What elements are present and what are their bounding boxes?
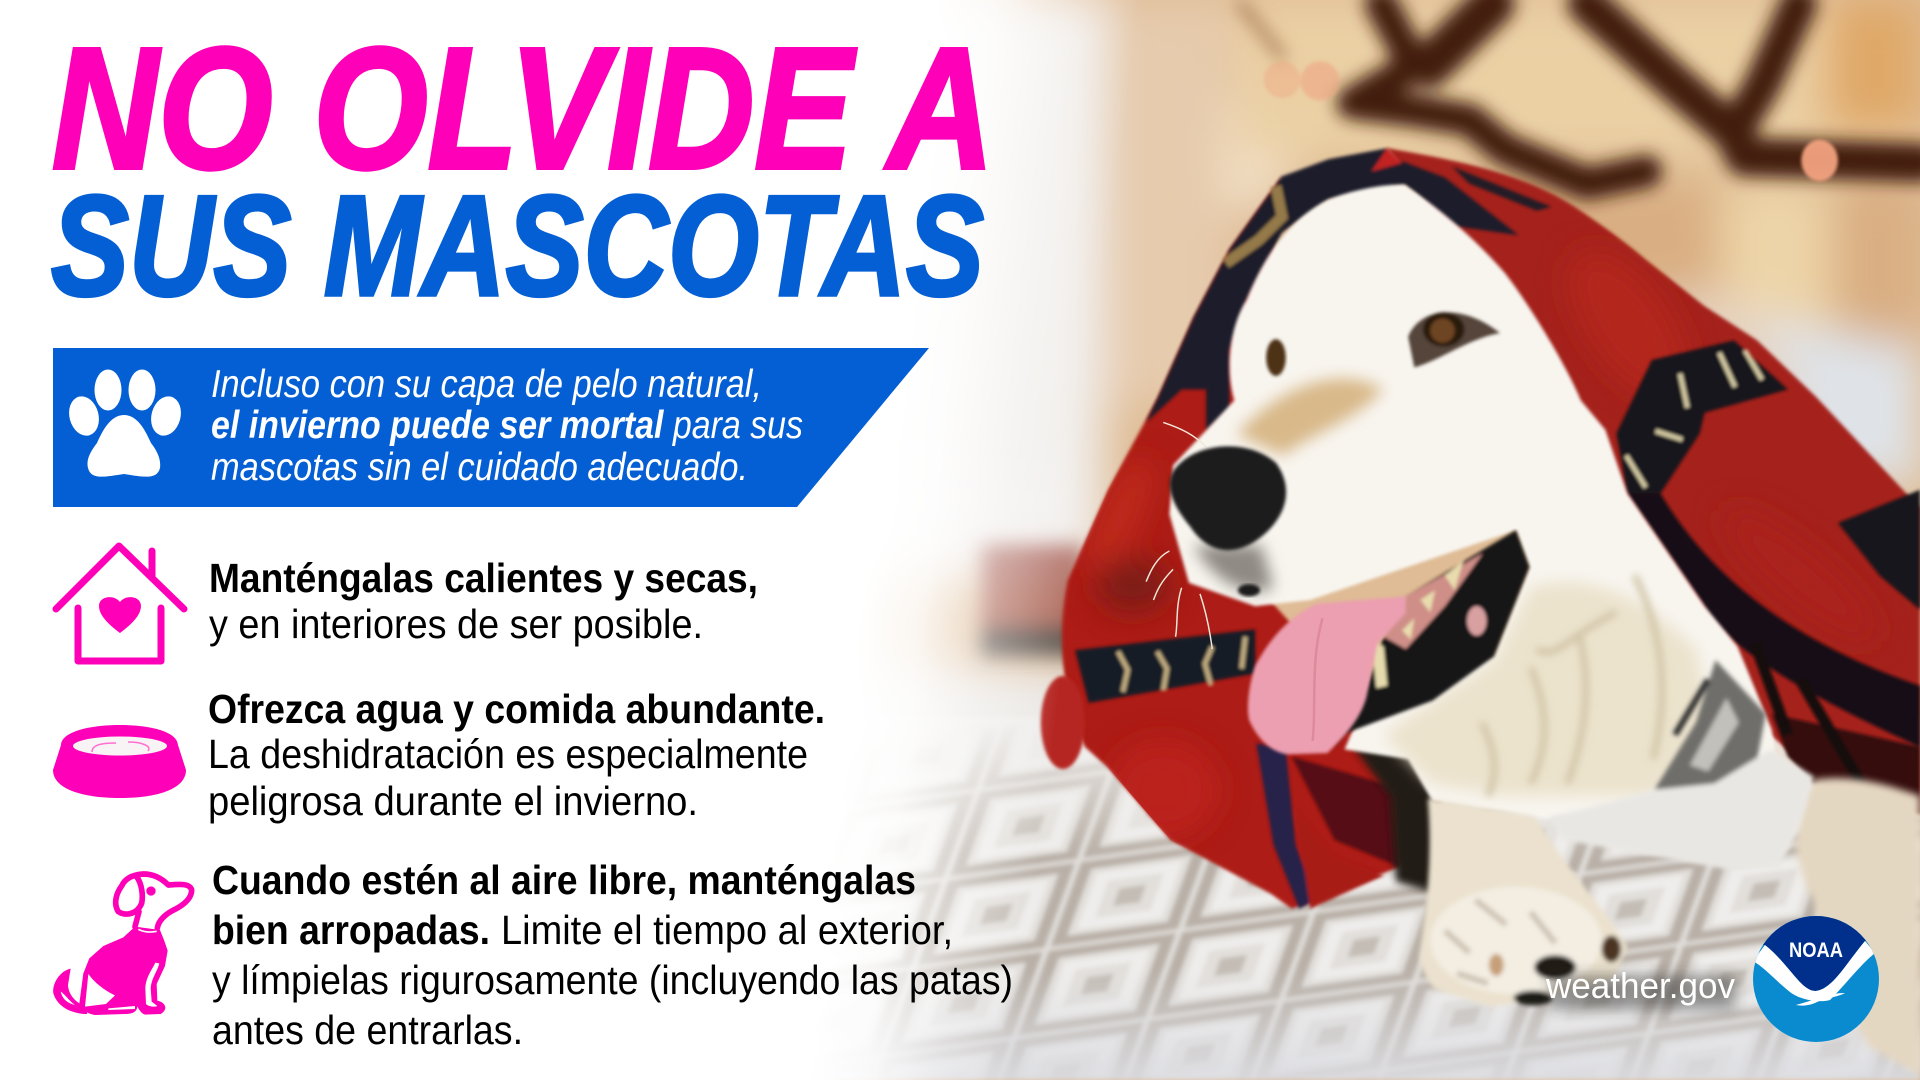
eye: right <box>1408 312 1500 367</box>
text: water and food: La deshidratación es especialmente <box>208 731 808 777</box>
website label: weather.gov <box>1545 965 1735 1006</box>
grey striped sweater <box>1549 660 1813 869</box>
text: keep warm and dry <box>209 555 758 647</box>
gold stripe on hood <box>1226 186 1282 263</box>
banner text: Incluso con su capa de pelo natural, <box>211 363 762 406</box>
blurred room background <box>784 0 1920 753</box>
banner text: mascotas sin el cuidado adecuado. <box>211 446 748 489</box>
dark lattice behind the dog <box>1240 4 1920 184</box>
black band with cream marks <box>1616 340 1788 493</box>
tan muzzle <box>1237 379 1384 456</box>
bokeh lights <box>1264 61 1838 181</box>
icon: paw <box>65 370 185 477</box>
shadow under the chin <box>1353 722 1439 894</box>
lower left blanket stripe <box>1075 629 1255 703</box>
patterned bedspread <box>784 716 1920 1080</box>
mouth corner dark spot <box>1238 584 1260 596</box>
blanket fold and shadow <box>1292 757 1400 867</box>
grey lower muzzle <box>1194 545 1273 592</box>
text: water and food <box>208 686 825 824</box>
dog front leg and paw <box>1420 798 1627 1007</box>
black square on back <box>1838 490 1920 610</box>
text: bundle up outdoors <box>212 857 1013 1053</box>
text: bundle up outdoors: Limite el tiempo al exterior, <box>501 907 953 953</box>
blanket: back and hood <box>1062 148 1920 909</box>
mouth <box>1333 530 1529 749</box>
room base colour <box>784 0 1920 1080</box>
icon: food bowl <box>53 725 186 798</box>
eye: left <box>1266 339 1286 376</box>
title line 1: NO OLVIDE A <box>52 11 994 205</box>
text: water and food: peligrosa durante el invierno. <box>208 778 698 824</box>
title line 2: SUS MASCOTAS <box>51 167 984 326</box>
white text panel background <box>0 0 790 1080</box>
photo: dog wrapped in a red blanket <box>771 0 1920 1080</box>
navy hood band <box>1146 148 1518 431</box>
icon: house with heart <box>56 546 184 661</box>
text: keep warm and dry: y en interiores de ser posible. <box>209 601 703 647</box>
blanket end near bed <box>1041 676 1085 769</box>
long black diagonal band <box>1627 493 1920 747</box>
text: keep warm and dry: Manténgalas calientes y secas, <box>209 555 758 601</box>
banner shape <box>53 348 929 507</box>
text: water and food: Ofrezca agua y comida abundante. <box>208 686 825 732</box>
banner text <box>211 363 803 489</box>
blanket bands and folds <box>1041 148 1920 909</box>
blue banner <box>53 348 929 507</box>
neck fur <box>1384 582 1714 796</box>
tongue <box>1248 596 1406 754</box>
faded blanket behind the dog <box>980 545 1084 656</box>
banner text: el invierno puede ser mortal para sus <box>211 404 803 447</box>
white shirt <box>1549 749 1813 869</box>
text: bundle up outdoors: y límpielas rigurosamente (incluyendo las patas) <box>212 957 1013 1003</box>
text: bundle up outdoors: bien arropadas. <box>212 907 490 953</box>
dark lower corner of blanket <box>1772 714 1920 814</box>
nose <box>1170 446 1286 550</box>
red left panel <box>1062 176 1445 909</box>
text: bundle up outdoors: antes de entrarlas. <box>212 1007 523 1053</box>
red back panel <box>1387 148 1920 814</box>
white fade over the left side of the photo <box>771 0 1194 1080</box>
soft light and dark areas in the red wool <box>1076 240 1682 850</box>
dog right leg <box>1796 778 1920 1075</box>
icon: sitting dog <box>53 874 192 1015</box>
NOAA logo <box>1753 916 1879 1042</box>
text: bundle up outdoors: Cuando estén al aire libre, manténgalas <box>212 857 916 903</box>
whiskers <box>1146 422 1212 649</box>
red patch at hood crown <box>1371 148 1402 171</box>
dog head and chest <box>1169 185 1776 818</box>
title <box>51 11 994 326</box>
NOAA logo: NOAA <box>1789 939 1843 962</box>
